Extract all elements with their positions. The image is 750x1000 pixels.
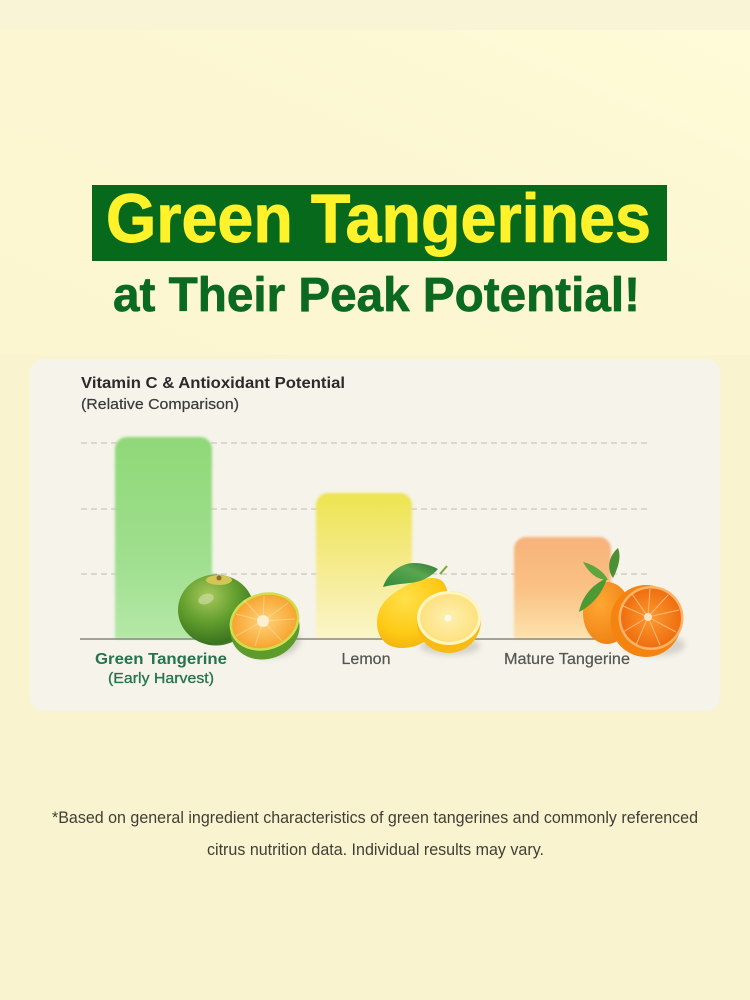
panel: comparison chart [30,359,720,711]
icon: mature tangerine [579,548,685,657]
axis [80,638,650,640]
label: green tangerine: Green Tangerine [95,651,227,668]
chart subheading: (Relative Comparison) [81,396,239,413]
footnote [52,808,698,859]
icon: green tangerine [178,574,308,668]
footnote: *Based on general ingredient characteristics of green tangerines and commonly referenced [52,808,698,827]
subtitle: at Their Peak Potential! [113,269,640,322]
label: green tangerine: (Early Harvest) [108,670,214,687]
bar: green tangerine [115,437,212,639]
grid lines [81,443,649,574]
title banner: Green Tangerines: Green Tangerines [106,180,651,257]
bar: mature tangerine [514,537,611,639]
label: green tangerine [95,651,227,687]
bar: lemon [316,493,412,639]
icon: lemon [377,563,481,655]
chart heading: Vitamin C & Antioxidant Potential [81,375,345,392]
title [92,180,667,322]
label: lemon: Lemon [342,651,390,668]
label: mature tangerine: Mature Tangerine [504,651,630,668]
footnote: citrus nutrition data. Individual results may vary. [207,840,544,859]
